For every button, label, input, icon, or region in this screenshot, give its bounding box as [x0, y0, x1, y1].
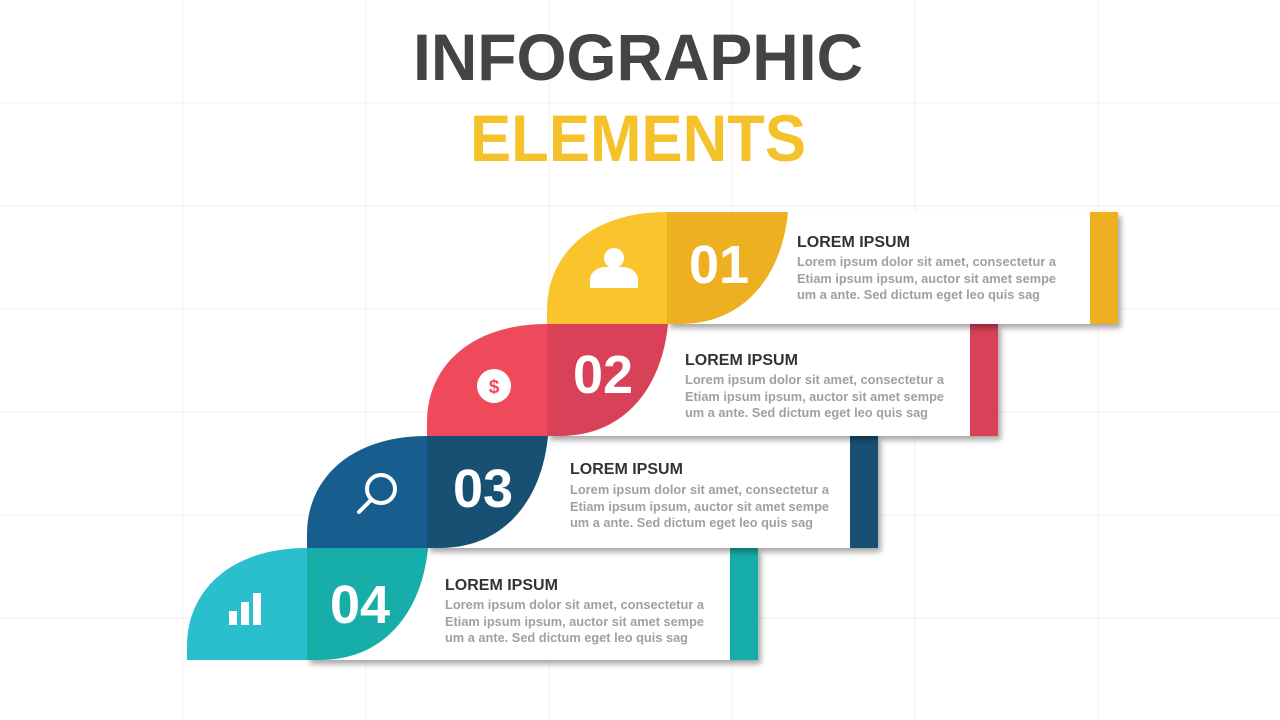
icon: magnifier: [359, 475, 395, 512]
step 04: 04: [330, 575, 390, 635]
step 04: Lorem ipsum dolor sit amet, consectetur a: [445, 598, 705, 612]
step 02: 02: [573, 345, 633, 405]
step 04: LOREM IPSUM: [445, 577, 558, 594]
step 03: 03: [453, 459, 513, 519]
step 04: um a ante. Sed dictum eget leo quis sag: [445, 631, 688, 645]
step 03: Lorem ipsum dolor sit amet, consectetur a: [570, 483, 830, 497]
step 02: Lorem ipsum dolor sit amet, consectetur a: [685, 373, 945, 387]
step 03: LOREM IPSUM: [570, 461, 683, 478]
step 04: Etiam ipsum ipsum, auctor sit amet sempe: [445, 615, 704, 629]
step 02: [427, 324, 998, 436]
step 03: um a ante. Sed dictum eget leo quis sag: [570, 516, 813, 530]
step 01: 01: [689, 235, 749, 295]
icon: dollar: [477, 369, 511, 403]
step 03: Etiam ipsum ipsum, auctor sit amet sempe: [570, 500, 829, 514]
icon: dollar: $: [489, 377, 500, 398]
icon: bar chart: [229, 593, 261, 625]
step 04: [187, 548, 758, 660]
icon: person: [590, 248, 638, 288]
step 02: Etiam ipsum ipsum, auctor sit amet sempe: [685, 390, 944, 404]
title: INFOGRAPHIC: [413, 20, 863, 94]
step 01: [547, 212, 1118, 324]
title: ELEMENTS: [470, 101, 806, 175]
step 01: Lorem ipsum dolor sit amet, consectetur a: [797, 255, 1057, 269]
step 03: [307, 436, 878, 548]
step 01: um a ante. Sed dictum eget leo quis sag: [797, 288, 1040, 302]
step 01: Etiam ipsum ipsum, auctor sit amet sempe: [797, 272, 1056, 286]
step 02: um a ante. Sed dictum eget leo quis sag: [685, 406, 928, 420]
step 01: LOREM IPSUM: [797, 234, 910, 251]
title: [413, 20, 863, 175]
step 02: LOREM IPSUM: [685, 352, 798, 369]
